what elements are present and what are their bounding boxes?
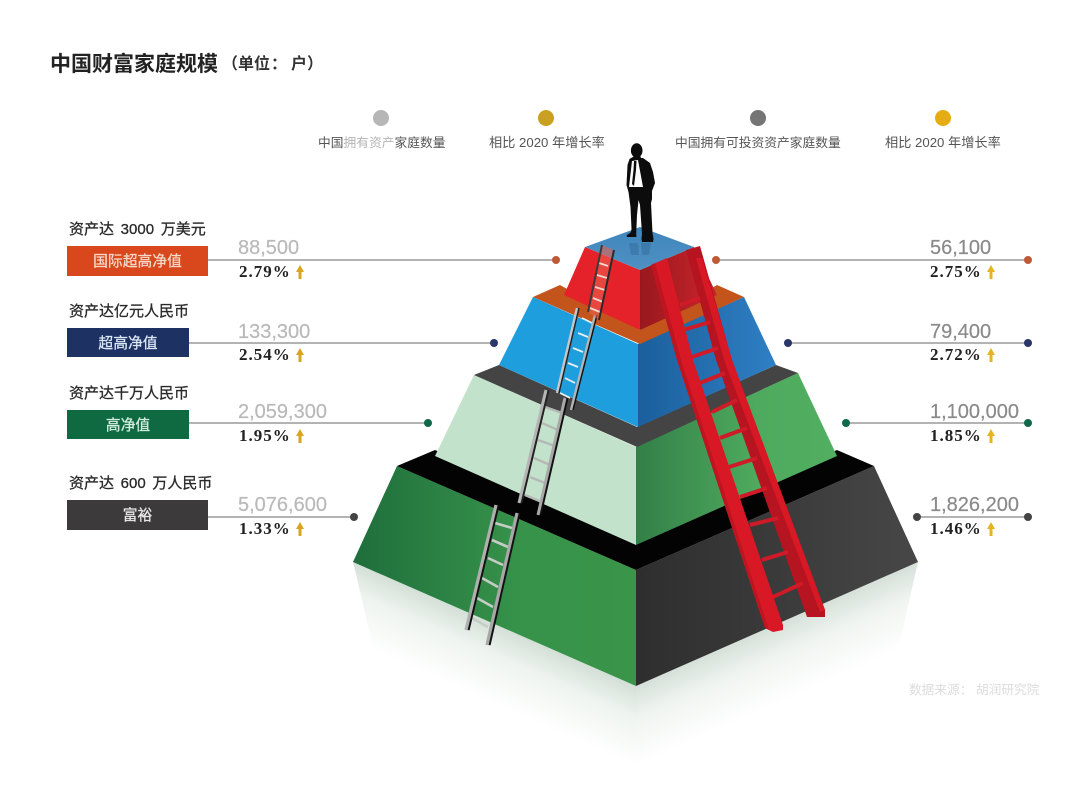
left number: 133,300 xyxy=(238,321,310,343)
tier row: wealthy xyxy=(67,475,1032,538)
tier label: 资产达 600 万人民币 xyxy=(69,475,212,492)
left growth: 1.33% xyxy=(239,519,291,538)
right leader line xyxy=(842,419,1032,427)
title: ） xyxy=(307,55,323,73)
grey ladder: lowest section xyxy=(466,505,519,645)
right growth: 2.75% xyxy=(930,262,982,281)
right growth: 2.72% xyxy=(930,345,982,364)
tier 1: international ultra high net worth xyxy=(564,227,717,330)
left number: 2,059,300 xyxy=(238,401,327,423)
floor reflection xyxy=(353,562,918,770)
tier row: ultra high net worth xyxy=(67,303,1032,364)
left leader line xyxy=(208,513,358,521)
right number: 1,100,000 xyxy=(930,401,1019,423)
legend item: growth rate right xyxy=(885,110,1001,150)
legend item: households with assets: 中国拥有资产家庭数量 xyxy=(318,135,446,150)
left growth: 2.79% xyxy=(239,262,291,281)
right growth: 1.46% xyxy=(930,519,982,538)
left leader line xyxy=(208,256,560,264)
tier label: 资产达亿元人民币 xyxy=(69,303,189,320)
tier label: 资产达 3000 万美元 xyxy=(69,221,206,238)
tier badge xyxy=(67,500,208,530)
legend item: households with investable assets: 中国拥有可投资资产家庭数量 xyxy=(675,135,841,150)
source note: 数据来源： 胡润研究院 xyxy=(909,683,1040,697)
right number: 79,400 xyxy=(930,321,991,343)
title: 中国财富家庭规模 xyxy=(50,52,218,76)
left leader line xyxy=(189,419,432,427)
tier row: high net worth xyxy=(67,385,1032,445)
businessman figure xyxy=(626,143,655,255)
tier badge: 高净值 xyxy=(106,417,150,434)
right leader line xyxy=(784,339,1032,347)
right leader line xyxy=(712,256,1032,264)
tier 4: wealthy xyxy=(353,450,918,686)
left growth: 1.95% xyxy=(239,426,291,445)
left number: 5,076,600 xyxy=(238,494,327,516)
legend xyxy=(318,110,1001,150)
legend item: growth rate left: 相比 2020 年增长率 xyxy=(489,134,605,150)
tier badge: 国际超高净值 xyxy=(93,253,182,270)
right leader line xyxy=(913,513,1032,521)
tier badge xyxy=(67,246,208,276)
tier 2: ultra high net worth xyxy=(499,285,776,427)
title: ： xyxy=(271,56,287,73)
legend item: growth rate left xyxy=(489,110,605,150)
title xyxy=(50,52,323,76)
tier row: international ultra high net worth xyxy=(67,221,1032,281)
tier label: 资产达千万人民币 xyxy=(69,385,189,402)
red ladder xyxy=(651,246,825,632)
right number: 1,826,200 xyxy=(930,494,1019,516)
right number: 56,100 xyxy=(930,237,991,259)
title: 户 xyxy=(291,54,307,73)
grey ladder: middle section xyxy=(519,390,567,515)
tier 3: high net worth xyxy=(435,365,837,545)
tier badge xyxy=(67,328,189,357)
left leader line xyxy=(189,339,498,347)
grey ladder: top section xyxy=(588,245,614,320)
tier badge: 超高净值 xyxy=(98,335,158,352)
legend item: households with investable assets xyxy=(675,110,841,150)
title: （ xyxy=(222,55,238,73)
tier badge: 富裕 xyxy=(123,506,152,524)
legend item: households with assets xyxy=(318,110,446,150)
left growth: 2.54% xyxy=(239,345,291,364)
grey ladder: upper section xyxy=(557,308,596,410)
legend item: growth rate right: 相比 2020 年增长率 xyxy=(885,134,1001,150)
pyramid xyxy=(353,143,918,770)
left number: 88,500 xyxy=(238,237,299,259)
title: 单位 xyxy=(238,54,270,73)
right growth: 1.85% xyxy=(930,426,982,445)
tier badge xyxy=(67,410,189,439)
